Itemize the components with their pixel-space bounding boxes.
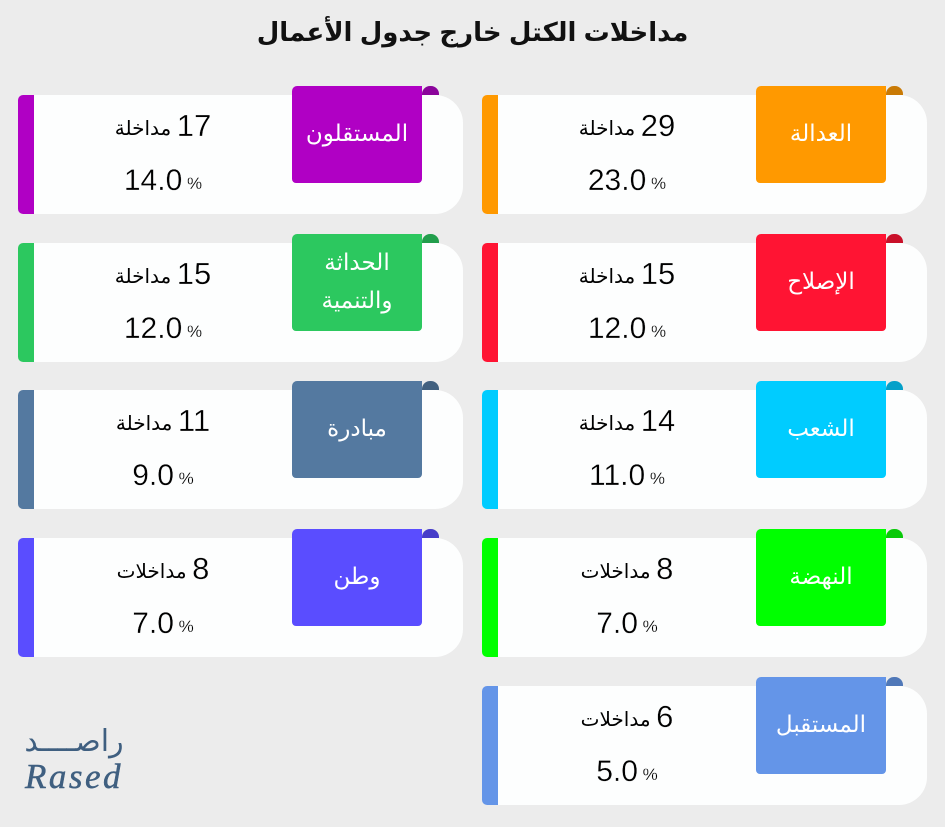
label: الحداثة (324, 248, 390, 274)
count: 8 مداخلات (581, 551, 673, 586)
logo: Rased (24, 725, 124, 796)
percentage: 7.0 % (132, 607, 194, 640)
fold (422, 234, 439, 243)
label (756, 677, 886, 774)
panel: الإصلاح (482, 243, 927, 362)
label (292, 234, 422, 331)
fold (886, 677, 903, 686)
label (756, 234, 886, 331)
percentage: 12.0 % (124, 312, 202, 345)
label: الإصلاح (787, 268, 855, 294)
logo latin wordmark: Rased (25, 757, 123, 796)
title: مداخلات الكتل خارج جدول الأعمال (257, 17, 688, 47)
panel: مبادرة (18, 390, 463, 509)
fold (422, 381, 439, 390)
count: 11 مداخلة (116, 403, 210, 438)
colour bar (482, 686, 498, 805)
panel: العدالة (482, 95, 927, 214)
colour bar (18, 243, 34, 362)
label: وطن (334, 562, 380, 588)
label: والتنمية (322, 286, 392, 312)
label: المستقبل (776, 710, 866, 736)
count: 15 مداخلة (579, 256, 675, 291)
label: مبادرة (327, 414, 387, 440)
panel: وطن (18, 538, 463, 657)
logo arabic wordmark: راصــــد (24, 725, 124, 758)
panel: الحداثة والتنمية (18, 243, 463, 362)
label: النهضة (789, 562, 853, 588)
label (756, 381, 886, 478)
percentage: 12.0 % (588, 312, 666, 345)
colour bar (482, 243, 498, 362)
colour bar (482, 390, 498, 509)
panel: المستقلون (18, 95, 463, 214)
colour bar (18, 390, 34, 509)
label: العدالة (790, 120, 852, 146)
percentage: 5.0 % (596, 755, 658, 788)
count: 8 مداخلات (117, 551, 209, 586)
percentage: 9.0 % (132, 459, 194, 492)
count: 14 مداخلة (579, 403, 675, 438)
colour bar (18, 538, 34, 657)
count: 6 مداخلات (581, 699, 673, 734)
count: 15 مداخلة (115, 256, 211, 291)
fold (886, 381, 903, 390)
label: الشعب (787, 414, 855, 440)
label (292, 381, 422, 478)
panel: الشعب (482, 390, 927, 509)
percentage: 14.0 % (124, 164, 202, 197)
fold (886, 234, 903, 243)
panel: المستقبل (482, 686, 927, 805)
panel: النهضة (482, 538, 927, 657)
label (756, 529, 886, 626)
fold (886, 86, 903, 95)
label: المستقلون (306, 120, 408, 146)
percentage: 23.0 % (588, 164, 666, 197)
fold (422, 529, 439, 538)
count: 17 مداخلة (115, 108, 211, 143)
fold (886, 529, 903, 538)
label (756, 86, 886, 183)
label (292, 529, 422, 626)
fold (422, 86, 439, 95)
percentage: 7.0 % (596, 607, 658, 640)
label (292, 86, 422, 183)
colour bar (18, 95, 34, 214)
colour bar (482, 538, 498, 657)
percentage: 11.0 % (589, 459, 665, 492)
colour bar (482, 95, 498, 214)
count: 29 مداخلة (579, 108, 675, 143)
